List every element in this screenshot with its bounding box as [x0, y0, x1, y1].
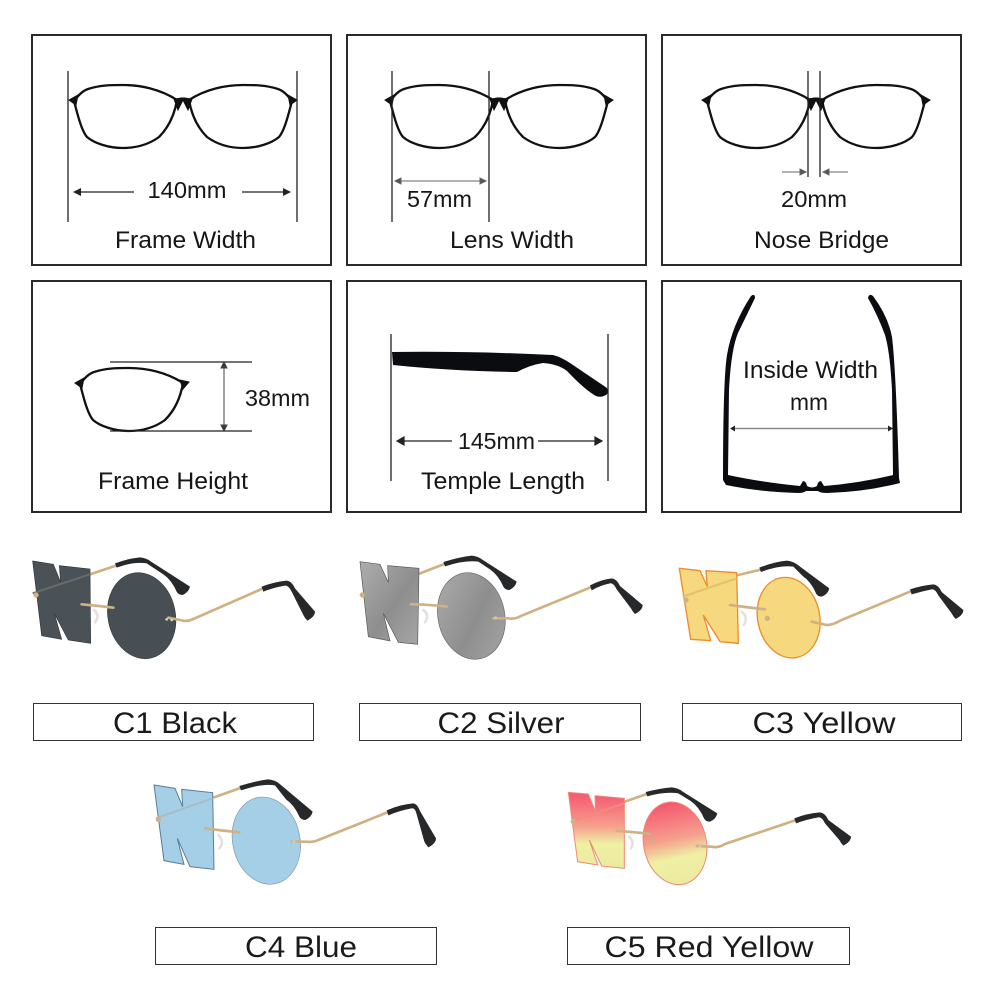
icon: glasses top view: [723, 295, 900, 493]
label: C5 Red Yellow: C5 Red Yellow: [604, 931, 814, 964]
value: 20mm: 20mm: [781, 186, 847, 212]
label: C5 Red Yellow: [568, 928, 850, 964]
label: C1 Black: C1 Black: [113, 707, 238, 740]
panel: nose bridge: [662, 35, 961, 265]
measure lines: [110, 362, 252, 431]
product: C4 Blue sunglasses: [154, 779, 436, 891]
measure lines: [808, 71, 820, 177]
label: C1 Black: [34, 704, 314, 740]
heading: Frame Width: Frame Width: [115, 227, 256, 254]
measure lines: [391, 334, 608, 481]
label: C3 Yellow: C3 Yellow: [752, 707, 896, 740]
product: C2 Silver sunglasses: [360, 556, 643, 666]
arrow: vertical: [221, 362, 227, 431]
panel: frame height: [32, 281, 331, 512]
heading: Frame Height: Frame Height: [98, 468, 248, 495]
arrows: [782, 169, 848, 175]
product: C1 Black sunglasses: [33, 557, 315, 665]
icon: glasses front: [702, 85, 930, 148]
measure lines and arrow: 57mm: [392, 71, 489, 222]
arrow: gray measure: [733, 428, 890, 430]
value: 57mm: 57mm: [407, 186, 472, 212]
panel: inside width: [662, 281, 961, 512]
measure lines and arrows: 140mm: [68, 71, 297, 222]
heading: Lens Width: Lens Width: [450, 227, 574, 254]
icon: glasses front: [385, 85, 613, 148]
value: 145mm: 145mm: [458, 428, 535, 454]
product: C3 Yellow sunglasses: [679, 561, 963, 664]
label: C4 Blue: C4 Blue: [245, 931, 357, 964]
heading: Inside Width: Inside Width: [743, 357, 878, 384]
icon: single lens: [75, 368, 189, 431]
heading: Temple Length: Temple Length: [421, 468, 585, 495]
label: C3 Yellow: [682, 704, 962, 740]
label: C2 Silver: [360, 704, 640, 740]
value: 140mm: 140mm: [148, 177, 226, 203]
arrows: [397, 437, 602, 445]
heading: Nose Bridge: Nose Bridge: [754, 227, 889, 254]
arrowheads: [730, 426, 893, 432]
panel: temple length: [347, 281, 646, 512]
arrowheads: [73, 188, 291, 196]
product: C5 Red Yellow sunglasses: [568, 787, 851, 891]
value: 38mm: 38mm: [245, 385, 310, 411]
panel: frame width: [32, 35, 331, 265]
value: mm: mm: [790, 389, 828, 415]
panel: lens width: [347, 35, 646, 265]
icon: temple arm: [392, 352, 608, 397]
arrow: [395, 178, 486, 184]
label: C2 Silver: C2 Silver: [438, 707, 565, 740]
label: C4 Blue: [156, 928, 436, 964]
icon: glasses front: [69, 85, 297, 148]
